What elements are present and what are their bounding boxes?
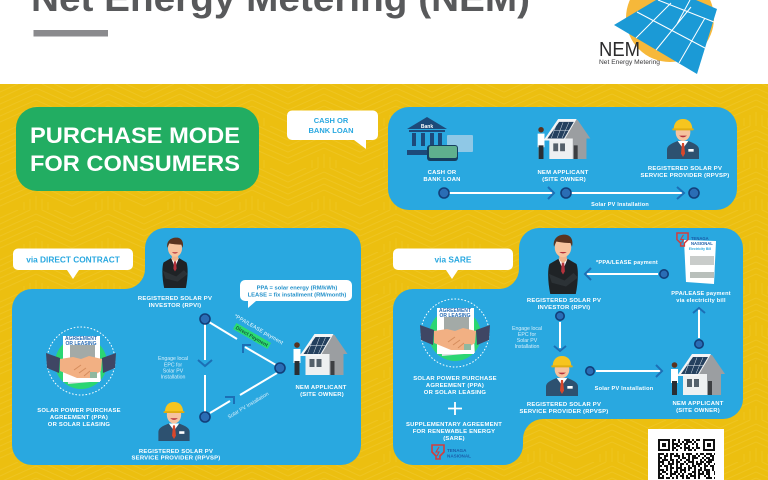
label: service provider: REGISTERED SOLAR PV [648, 166, 722, 172]
callout: via direct contract: via DIRECT CONTRACT [26, 254, 120, 264]
label: solar power purchase agreement: AGREEMENT (PPA) [426, 383, 484, 389]
icon: electricity bill [677, 233, 716, 284]
icon: electricity bill: Electricity Bill [689, 247, 711, 251]
label: engage local EPC: Solar PV [163, 368, 184, 374]
icon: bank with cash and card [407, 117, 473, 161]
label: engage local EPC: EPC for [164, 362, 182, 368]
label: PPA lease payment: *PPA/LEASE payment [596, 260, 658, 266]
panel: via direct contract [12, 228, 361, 465]
callout: PPA and lease: PPA = solar energy (RM/kWh) [257, 286, 337, 292]
flow arrows [554, 268, 705, 377]
callout: via SARE [393, 248, 513, 279]
NEM logo [599, 0, 717, 74]
label: NEM applicant: NEM APPLICANT [537, 170, 589, 176]
document subheading: OR LEASING [65, 341, 97, 347]
title underline [34, 30, 108, 36]
icon: electricity bill: TENAGA [691, 236, 709, 241]
callout: cash or bank loan: BANK LOAN [308, 126, 354, 135]
heading panel: purchase mode [16, 107, 259, 191]
label: engage local EPC: Solar PV [517, 338, 538, 344]
label: solar power purchase agreement: SOLAR POWER PURCHASE [37, 408, 121, 414]
callout: PPA and lease [240, 280, 352, 308]
icon: sun [626, 0, 714, 62]
QR code [648, 429, 724, 480]
logo: Tenaga Nasional [432, 445, 471, 459]
panel: cash or bank loan flow [388, 107, 737, 210]
logo tagline: Net Energy Metering [599, 59, 660, 66]
callout: cash or bank loan [287, 110, 378, 149]
label: service provider: SERVICE PROVIDER (RPVSP) [520, 409, 608, 415]
document heading: AGREEMENT [439, 308, 471, 314]
label: service provider: REGISTERED SOLAR PV [139, 449, 213, 455]
icon: service provider [158, 402, 190, 441]
icon: house with owner [538, 119, 590, 159]
label: supplementary agreement: SUPPLEMENTARY AGREEMENT [406, 422, 502, 428]
callout: PPA and lease: LEASE = fix installment (RM/month) [248, 292, 346, 298]
flow triangle [198, 314, 285, 422]
label: engage local EPC: Engage local [512, 326, 542, 332]
heading text: PURCHASE MODE [30, 123, 240, 148]
label: solar power purchase agreement: SOLAR POWER PURCHASE [413, 376, 497, 382]
heading text: FOR CONSUMERS [30, 151, 240, 176]
icon: investor [548, 235, 578, 294]
label: NEM applicant: (SITE OWNER) [676, 408, 720, 414]
icon: plus [448, 402, 462, 415]
icon: solar panel [614, 0, 717, 74]
icon: house with owner [671, 354, 725, 395]
label: solar power purchase agreement: AGREEMENT (PPA) [50, 415, 108, 421]
icon: service provider [546, 356, 578, 396]
icon: agreement handshake [46, 327, 116, 395]
label: NEM applicant: NEM APPLICANT [295, 385, 347, 391]
label: supplementary agreement: (SARE) [443, 436, 465, 442]
label: engage local EPC: EPC for [518, 332, 536, 338]
label: engage local EPC: Installation [161, 374, 186, 380]
label: solar power purchase agreement: OR SOLAR LEASING [48, 422, 110, 428]
icon: investor [162, 238, 188, 288]
logo: Tenaga Nasional: TENAGA [447, 448, 467, 453]
label: cash or bank loan: CASH OR [428, 170, 457, 176]
document subheading: OR LEASING [439, 313, 471, 319]
logo: Tenaga Nasional: NASIONAL [447, 454, 471, 458]
label: PPA lease payment: *PPA/LEASE payment [233, 313, 284, 347]
label: cash or bank loan: BANK LOAN [423, 177, 461, 183]
document heading: AGREEMENT [65, 336, 97, 342]
label: NEM applicant: (SITE OWNER) [542, 177, 586, 183]
label: payment via electricity bill: via electricity bill [676, 298, 726, 304]
icon: service provider [667, 119, 699, 159]
panel: via SARE [393, 228, 743, 465]
callout: via direct contract [13, 248, 133, 279]
icon: agreement handshake [420, 299, 490, 367]
callout: via SARE: via SARE [435, 254, 472, 264]
label: service provider: SERVICE PROVIDER (RPVSP) [132, 456, 220, 462]
callout: cash or bank loan: CASH OR [314, 116, 349, 125]
label: solar power purchase agreement: OR SOLAR LEASING [424, 390, 486, 396]
label: NEM applicant: NEM APPLICANT [672, 401, 724, 407]
icon: bank with cash and card: Bank [421, 124, 433, 130]
tag: direct payment: Direct Payment [234, 325, 269, 349]
label: investor: INVESTOR (RPVI) [149, 303, 201, 309]
label: service provider: SERVICE PROVIDER (RPVSP) [641, 173, 729, 179]
label: investor: REGISTERED SOLAR PV [138, 296, 212, 302]
icon: house with owner [294, 334, 348, 375]
label: engage local EPC: Installation [515, 344, 540, 350]
logo wordmark: NEM [599, 39, 640, 61]
label: investor: INVESTOR (RPVI) [538, 305, 590, 311]
label: investor: REGISTERED SOLAR PV [527, 298, 601, 304]
icon: electricity bill: NASIONAL [691, 241, 713, 246]
label: payment via electricity bill: PPA/LEASE payment [671, 291, 731, 297]
label: solar PV installation: Solar PV Installation [595, 386, 654, 392]
label: NEM applicant: (SITE OWNER) [300, 392, 344, 398]
page header background [0, 0, 768, 84]
label: solar PV installation: Solar PV Installation [227, 391, 270, 420]
label: supplementary agreement: FOR RENEWABLE ENERGY [413, 429, 495, 435]
flow arrows [439, 187, 699, 199]
label: engage local EPC: Engage local [158, 356, 188, 362]
label: service provider: REGISTERED SOLAR PV [527, 402, 601, 408]
label: solar PV installation: Solar PV Installation [591, 202, 649, 208]
